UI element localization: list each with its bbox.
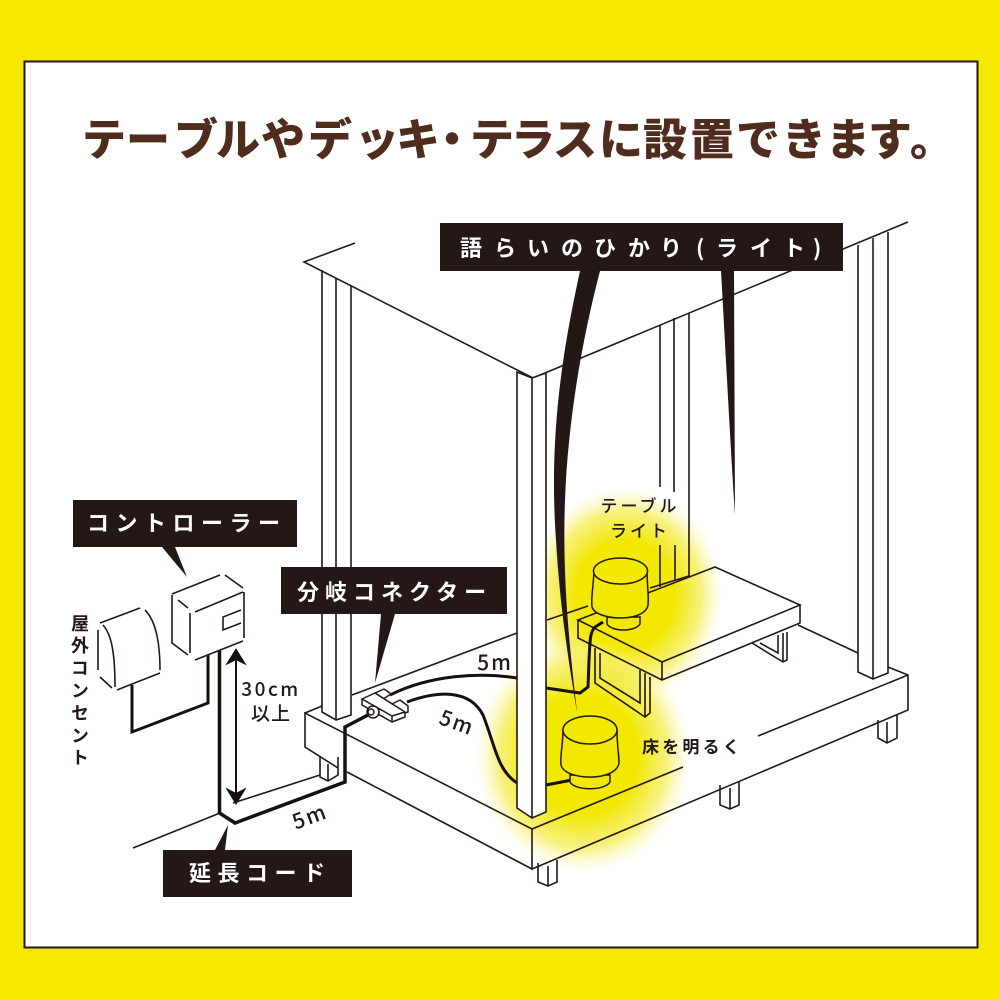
table light xyxy=(592,558,648,630)
callout: controller xyxy=(73,500,297,577)
length label: extension cord: 5m xyxy=(288,796,332,836)
callout: branch connector: 分岐コネクター xyxy=(297,575,492,607)
cable over table xyxy=(589,622,603,660)
callout: light name xyxy=(440,223,843,712)
branch connector xyxy=(362,689,408,722)
height label second line: 以上 xyxy=(251,699,291,726)
label: table light: テーブル xyxy=(601,492,679,517)
outdoor outlet xyxy=(98,608,160,690)
callout: light name: 語らいのひかり(ライト) xyxy=(460,231,821,263)
deck structure xyxy=(133,222,908,886)
controller box xyxy=(172,575,244,660)
height arrow xyxy=(228,650,244,803)
height label: 30cm xyxy=(241,675,301,702)
callout: extension cord xyxy=(163,825,352,897)
length label: lower cable: 5m xyxy=(435,702,479,742)
callout: branch connector xyxy=(281,567,507,683)
light glow: table light xyxy=(527,487,723,703)
title: テーブルやデッキ・テラスに設置できます。 xyxy=(82,104,954,168)
front post xyxy=(517,372,546,818)
callout: controller: コントローラー xyxy=(87,506,287,538)
callout: extension cord: 延長コード xyxy=(189,856,332,888)
label: table light second line: ライト xyxy=(610,517,670,542)
vertical label: outdoor outlet: 屋外コンセント xyxy=(67,614,93,771)
label: brighten floor: 床を明るく xyxy=(642,733,743,758)
extension and lamp cables xyxy=(132,650,589,823)
length label: upper cable: 5m xyxy=(477,647,513,677)
floor light xyxy=(561,716,619,789)
light glow: floor light xyxy=(475,637,691,873)
table xyxy=(578,567,800,717)
